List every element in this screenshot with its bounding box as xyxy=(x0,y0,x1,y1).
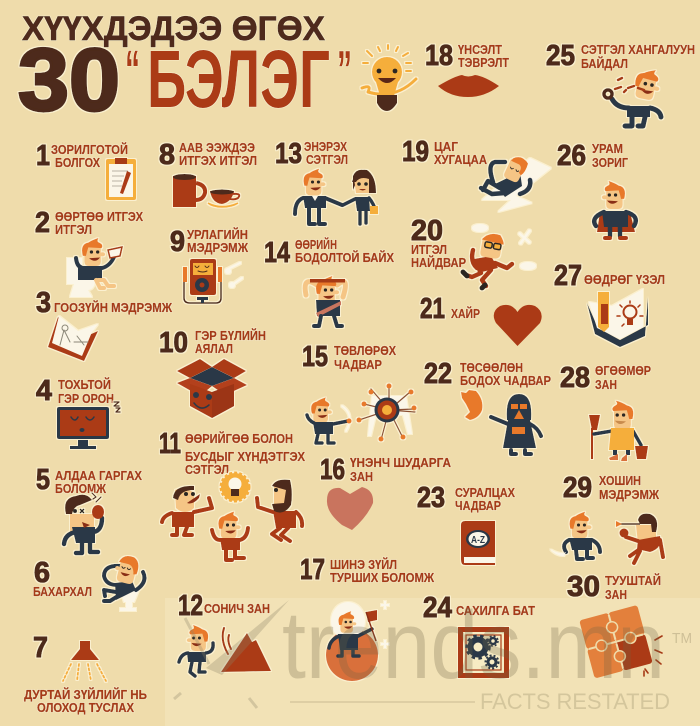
item 8 heading: ААВ ЭЭЖДЭЭ xyxy=(179,140,255,155)
item 28 heading: ӨГӨӨМӨР xyxy=(595,363,651,378)
item 30 heading: ТУУШТАЙ xyxy=(605,573,661,588)
item 10 heading: ГЭР БҮЛИЙН xyxy=(195,328,266,343)
icon: relaxed person in chair xyxy=(104,553,144,611)
icon: open drawing book xyxy=(48,316,98,361)
item 25 heading: БАЙДАЛ xyxy=(581,56,628,71)
item 22 heading xyxy=(424,358,551,390)
item 13 heading: ЭНЭРЭХ xyxy=(304,139,347,154)
item 27 heading xyxy=(554,260,665,292)
item 25 heading xyxy=(546,40,695,72)
icon: two people shaking hands xyxy=(295,169,378,224)
item 9 heading: МЭДРЭМЖ xyxy=(187,240,248,255)
item 1 heading: БОЛГОХ xyxy=(55,155,100,170)
item 6 heading: 6 xyxy=(34,557,50,589)
title line 1: ХҮҮХДЭДЭЭ ӨГӨХ xyxy=(22,10,325,48)
item 23 heading: ЧАДВАР xyxy=(455,498,501,513)
item 14 heading: 14 xyxy=(264,237,290,269)
A-Z text: A-Z xyxy=(471,535,485,546)
icon: person with arrow through head xyxy=(616,514,663,563)
icon: astronaut on planet xyxy=(326,601,389,681)
item 30 heading xyxy=(567,571,661,603)
item 29 heading xyxy=(563,472,659,504)
item 13 heading: 13 xyxy=(275,138,302,170)
watermark logo xyxy=(174,592,692,714)
item 8 heading: 8 xyxy=(159,139,175,171)
icon: ceiling lamp with light rays xyxy=(63,641,106,681)
item 14 heading: ӨӨРИЙН xyxy=(295,237,337,252)
item 17 heading: ШИНЭ ЗҮЙЛ xyxy=(330,557,397,572)
item 24 heading: 24 xyxy=(423,592,452,624)
icon: light bulb xyxy=(362,45,416,111)
item 1 heading xyxy=(36,140,128,172)
item 26 heading: 26 xyxy=(557,140,586,172)
item 11 heading xyxy=(159,428,305,477)
icon: book with pencil and idea bulb xyxy=(587,289,648,347)
item 4 heading: ГЭР ОРОН xyxy=(58,391,114,406)
item 16 heading: ЗАН xyxy=(350,469,373,484)
icon: handshake xyxy=(327,487,373,530)
icon: puzzle pieces xyxy=(579,605,662,678)
item 13 heading: СЭТГЭЛ xyxy=(306,152,348,167)
item 2 heading: 2 xyxy=(35,207,50,239)
title xyxy=(18,10,352,129)
item 16 heading: ҮНЭНЧ ШУДАРГА xyxy=(350,455,452,470)
item 29 heading: ХОШИН xyxy=(599,473,641,488)
item 4 heading: ТОХЬТОЙ xyxy=(58,377,111,392)
watermark trademark: TM xyxy=(672,630,692,647)
icon: coffee cups xyxy=(173,174,239,207)
item 18 heading: ТЭВРЭЛТ xyxy=(458,55,509,70)
item 19 heading: 19 xyxy=(402,136,429,168)
item 30 heading: ЗАН xyxy=(605,587,627,602)
item 22 heading: БОДОХ ЧАДВАР xyxy=(460,373,551,388)
icon: person laughing with knife xyxy=(550,512,600,559)
item 22 heading: ТӨСӨӨЛӨН xyxy=(460,360,523,375)
item 20 heading: ИТГЭЛ xyxy=(411,242,447,257)
icon: person with headband xyxy=(305,276,345,326)
item 28 heading: 28 xyxy=(560,362,590,394)
item 7 heading: 7 xyxy=(33,632,48,664)
item 23 heading xyxy=(417,482,515,514)
item 26 heading: УРАМ xyxy=(592,141,623,156)
item 22 heading: 22 xyxy=(424,358,452,390)
title word gift: БЭЛЭГ xyxy=(147,34,330,125)
item 4 heading xyxy=(36,375,114,407)
item 24 heading: САХИЛГА БАТ xyxy=(456,603,535,618)
item 23 heading: СУРАЛЦАХ xyxy=(455,485,515,500)
item 3 heading xyxy=(36,287,172,319)
item 15 heading xyxy=(302,341,396,373)
item 13 heading xyxy=(275,138,348,170)
item 28 heading: ЗАН xyxy=(595,377,617,392)
item 12 heading: СОНИЧ ЗАН xyxy=(204,601,270,616)
icon: sleeping television xyxy=(57,402,120,449)
item 15 heading: ЧАДВАР xyxy=(334,357,382,372)
item 20 heading: 20 xyxy=(411,215,443,247)
item 18 heading: 18 xyxy=(425,40,453,72)
item 9 heading xyxy=(170,226,248,258)
icon: person with boxing glove xyxy=(64,493,104,553)
watermark line xyxy=(290,701,475,703)
title number 30: 30 xyxy=(18,30,120,129)
item 12 heading: 12 xyxy=(178,590,203,622)
item 18 heading xyxy=(425,40,509,72)
icon: A-Z book xyxy=(461,521,495,565)
item 19 heading: ХУГАЦАА xyxy=(434,152,488,167)
item 8 heading xyxy=(159,139,257,171)
watermark panel xyxy=(165,598,700,726)
item 21 heading xyxy=(420,293,480,325)
icon: three people and light bulb xyxy=(162,473,302,560)
icon: smiling music player xyxy=(183,259,242,303)
item 18 heading: ҮНСЭЛТ xyxy=(458,42,502,57)
item 5 heading: АЛДАА ГАРГАХ xyxy=(55,468,142,483)
item 17 heading: 17 xyxy=(300,554,325,586)
icon: person reclining in deck chair xyxy=(481,154,551,212)
icon: superhero xyxy=(594,181,636,238)
item 5 heading xyxy=(36,464,142,496)
item 16 heading xyxy=(320,454,452,486)
watermark tagline: FACTS RESTATED xyxy=(480,689,670,714)
title opening quote: “ xyxy=(125,40,140,100)
item 26 heading xyxy=(557,140,629,172)
item 23 heading: 23 xyxy=(417,482,445,514)
icon: clipboard xyxy=(106,158,136,200)
item 2 heading: ИТГЭЛ xyxy=(55,222,92,237)
item 2 heading: ӨӨРТӨӨ ИТГЭХ xyxy=(55,209,143,224)
item 21 heading: 21 xyxy=(420,293,445,325)
watermark checkmark xyxy=(174,600,289,708)
icon: person shouting at mountain xyxy=(179,625,271,676)
item 10 heading: 10 xyxy=(159,327,188,359)
item 27 heading: 27 xyxy=(554,260,582,292)
icon: dog xyxy=(461,390,482,420)
icon: person on toilet reading xyxy=(67,238,122,297)
icon: target with arrows xyxy=(356,384,416,442)
icon: person eating donut xyxy=(604,67,663,126)
item 1 heading: ЗОРИЛГОТОЙ xyxy=(51,142,128,157)
item 17 heading: ТУРШИХ БОЛОМЖ xyxy=(330,570,434,585)
item 11 heading: ӨӨРИЙГӨӨ БОЛОН xyxy=(185,431,293,446)
item 29 heading: МЭДРЭМЖ xyxy=(599,487,659,502)
item 24 heading xyxy=(423,592,535,624)
item 9 heading: 9 xyxy=(170,226,185,258)
item 4 heading: 4 xyxy=(36,375,52,407)
item 14 heading: БОДОЛТОЙ БАЙХ xyxy=(295,250,394,265)
item 15 heading: 15 xyxy=(302,341,328,373)
icon: flying person with goggles, plane and clouds xyxy=(463,224,536,288)
item 10 heading xyxy=(159,327,266,359)
icon: cleaning person xyxy=(589,401,648,461)
icon: masked villain xyxy=(491,394,541,454)
icon: stamp with gears xyxy=(458,627,509,678)
icon: lips xyxy=(438,75,499,97)
item 20 heading: НАЙДВАР xyxy=(411,255,466,270)
item 7 heading xyxy=(24,632,147,715)
item 11 heading: БУСДЫГ ХҮНДЭТГЭХ xyxy=(185,449,305,464)
icon: smiling cardboard box xyxy=(177,359,247,418)
item 11 heading: 11 xyxy=(159,428,181,460)
item 28 heading xyxy=(560,362,651,394)
item 26 heading: ЗОРИГ xyxy=(592,155,629,170)
item 8 heading: ИТГЭХ ИТГЭЛ xyxy=(179,153,257,168)
item 5 heading: БОЛОМЖ xyxy=(55,481,106,496)
item 1 heading: 1 xyxy=(36,140,50,172)
item 9 heading: УРЛАГИЙН xyxy=(187,227,248,242)
item 19 heading: ЦАГ xyxy=(434,139,459,154)
item 27 heading: ӨӨДРӨГ ҮЗЭЛ xyxy=(584,272,665,287)
item 2 heading xyxy=(35,207,143,239)
item 6 heading xyxy=(33,557,92,599)
icon: heart xyxy=(494,305,542,346)
item 7 heading: ОЛОХОД ТУСЛАХ xyxy=(37,700,134,715)
item 19 heading xyxy=(402,136,488,168)
title closing quote: ” xyxy=(337,40,352,100)
item 20 heading xyxy=(411,215,466,270)
item 11 heading: СЭТГЭЛ xyxy=(185,462,229,477)
item 17 heading xyxy=(300,554,434,586)
item 12 heading xyxy=(178,590,270,622)
item 21 heading: ХАЙР xyxy=(451,306,480,321)
item 3 heading: ГООЗҮЙН МЭДРЭМЖ xyxy=(54,300,172,315)
item 6 heading: БАХАРХАЛ xyxy=(33,584,92,599)
icon: archer xyxy=(307,397,352,443)
item 16 heading: 16 xyxy=(320,454,345,486)
item 14 heading xyxy=(264,237,394,269)
item 5 heading: 5 xyxy=(36,464,50,496)
item 7 heading: ДУРТАЙ ЗҮЙЛИЙГ НЬ xyxy=(24,687,147,702)
item 29 heading: 29 xyxy=(563,472,592,504)
item 15 heading: ТӨВЛӨРӨХ xyxy=(334,343,396,358)
item 30 heading: 30 xyxy=(567,571,600,603)
watermark wordmark: trends.mn xyxy=(282,592,665,699)
item 3 heading: 3 xyxy=(36,287,51,319)
item 10 heading: АЯЛАЛ xyxy=(195,341,233,356)
item 25 heading: 25 xyxy=(546,40,575,72)
